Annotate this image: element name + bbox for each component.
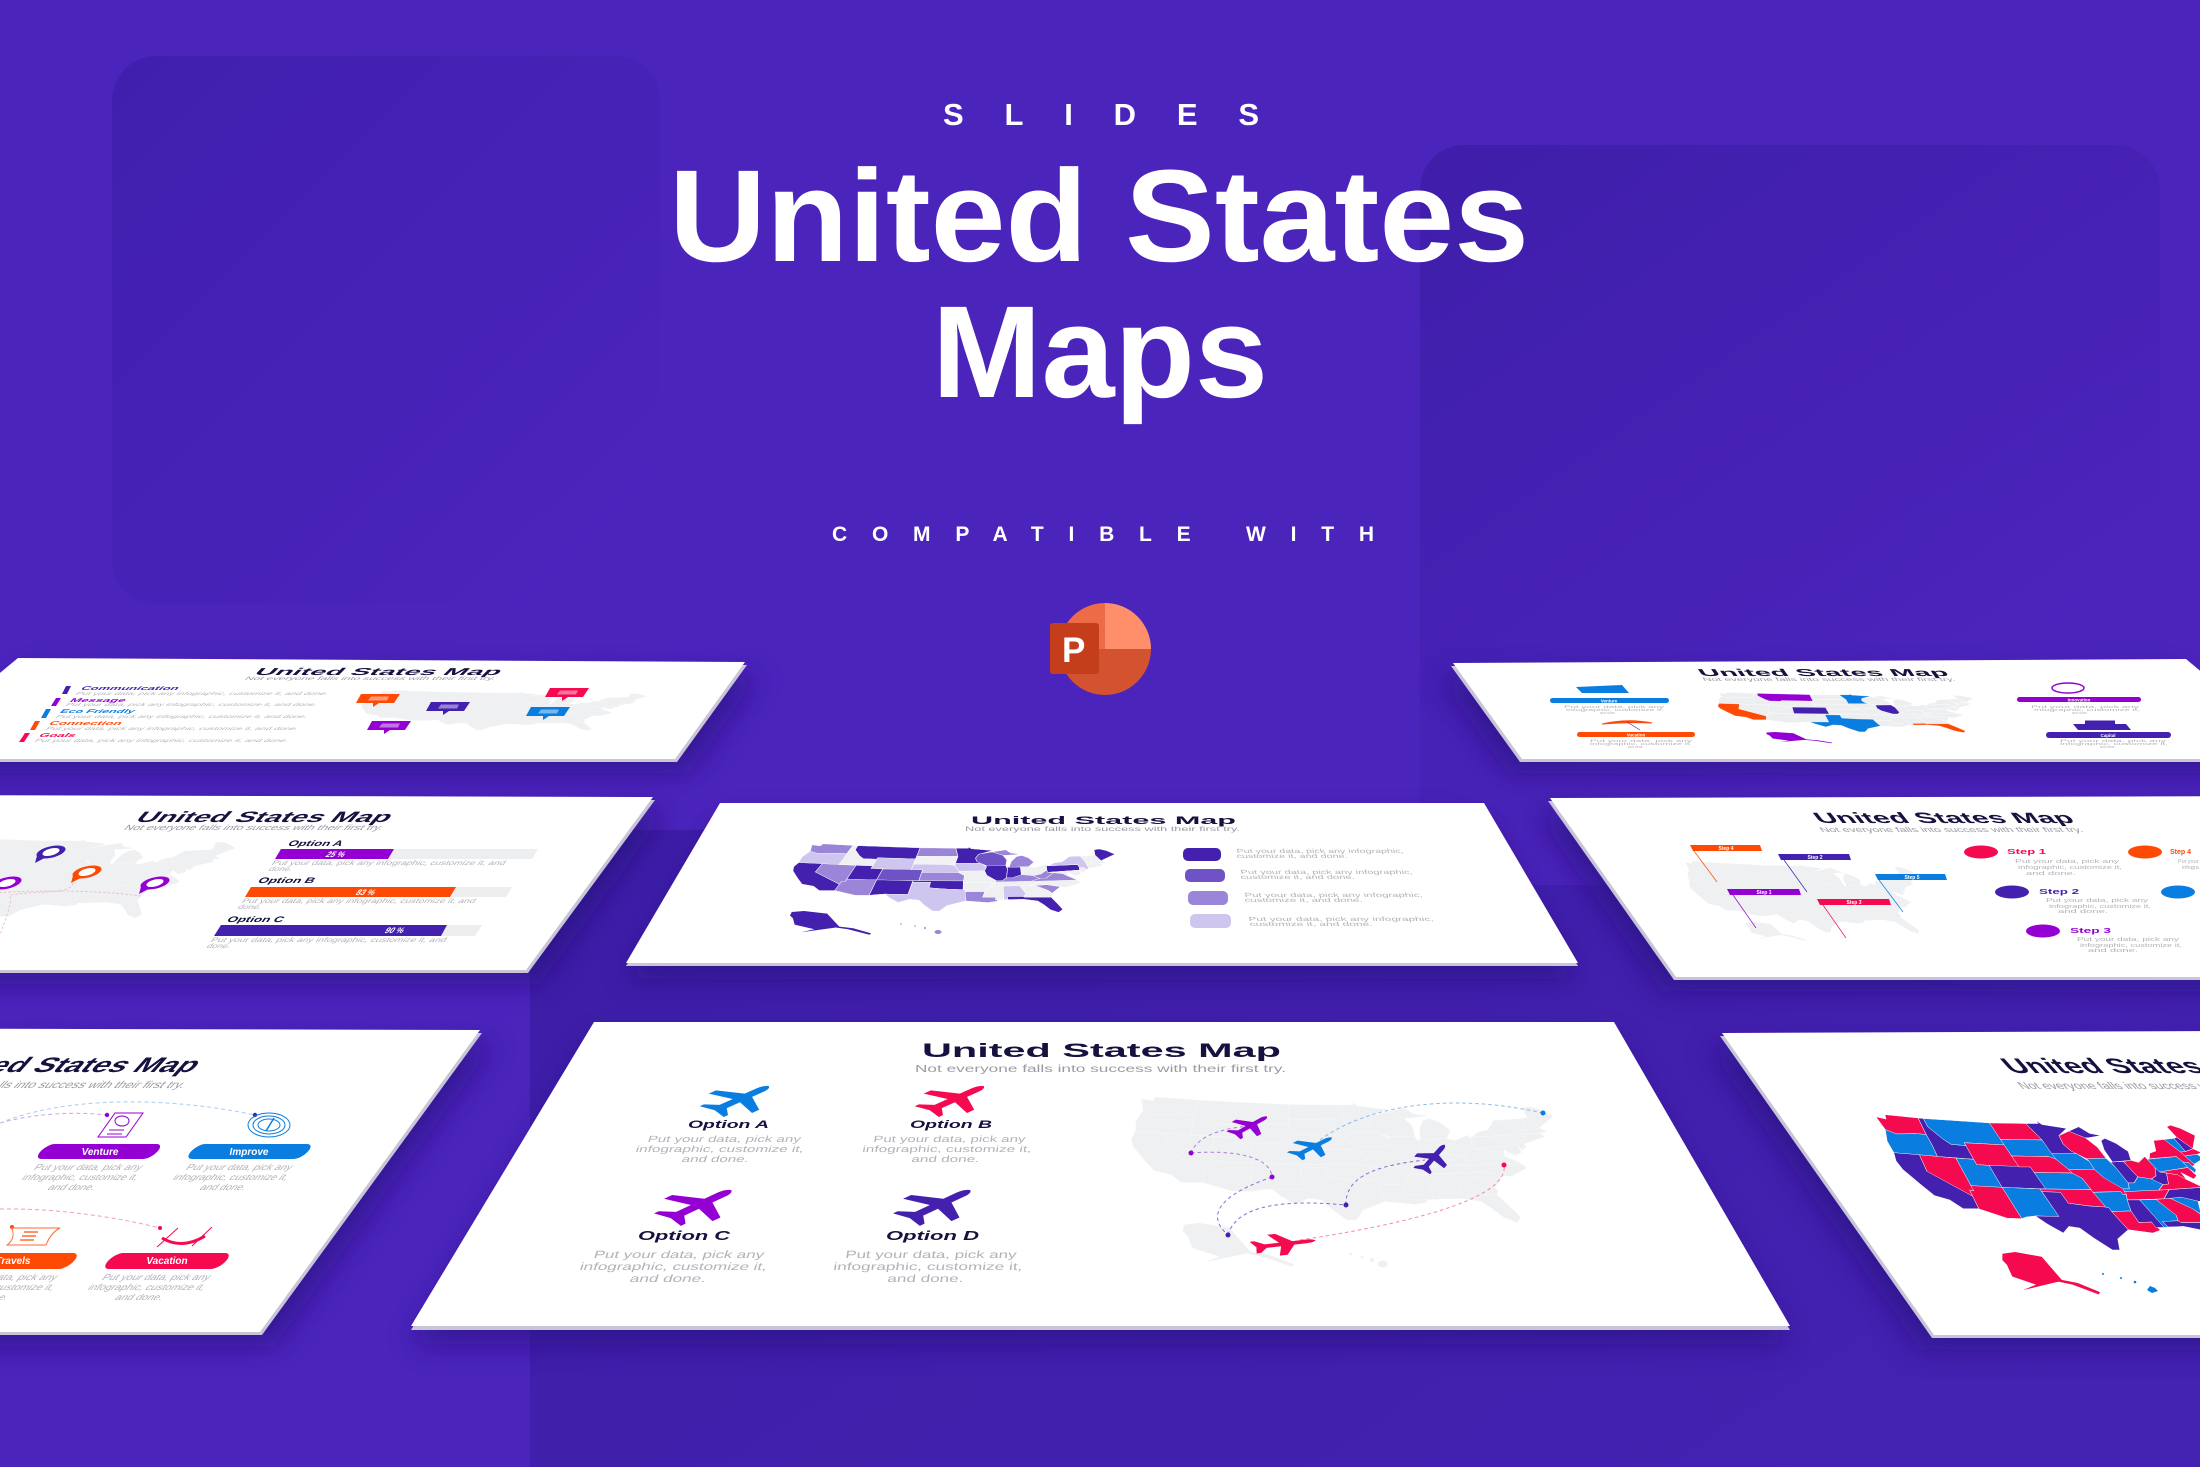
slide title: United States Map <box>1994 1054 2200 1078</box>
bar: Option B 83%: done. <box>236 903 264 911</box>
map planes <box>1221 1109 1459 1258</box>
slide subtitle: Not everyone falls into success with their first try. <box>915 1064 1286 1075</box>
legend swatches and text: Put your data, pick any infographic, <box>1236 848 1405 855</box>
legend swatches and text: customize it, and done. <box>1236 853 1349 860</box>
icon: PowerPoint logo <box>1050 603 1151 695</box>
pills: Venture <box>82 1147 119 1158</box>
icon: document <box>98 1113 143 1137</box>
option B: infographic, customize it, <box>862 1144 1032 1154</box>
bar: Option C 90%: 90 % <box>383 926 407 935</box>
icon: flag <box>1576 685 1629 693</box>
bar: Option B 83%: 83 % <box>354 888 378 897</box>
descriptions: infographic, customize it, <box>2060 742 2168 746</box>
slide title: United States Map <box>971 815 1237 827</box>
flags: Step 5 <box>1904 875 1920 881</box>
pill: Venture <box>1550 698 1669 704</box>
pills <box>0 1144 315 1269</box>
choropleth map <box>785 844 1117 912</box>
bar: Option A 25% <box>267 839 538 873</box>
legend swatches and text: customize it, and done. <box>1244 897 1364 904</box>
slide subtitle: Not everyone falls into success with their first try. <box>965 827 1241 833</box>
descriptions: Put your data, pick any <box>183 1163 296 1173</box>
slide subtitle: Not everyone falls into success with their first try. <box>1701 677 1958 683</box>
option D: and done. <box>887 1273 964 1285</box>
option D: Option D <box>886 1228 980 1243</box>
list of five topics: Put your data, pick any infographic, customize it, and done. <box>32 739 291 744</box>
icon: hammock <box>157 1227 212 1247</box>
pills: Improve <box>230 1147 269 1158</box>
bar: Option A 25%: Option A <box>286 839 347 848</box>
bar: Option A 25%: done. <box>267 865 295 873</box>
Hawaii <box>1350 1252 1388 1268</box>
flags: Step 1 <box>1756 890 1772 896</box>
option B: Option B <box>910 1119 992 1131</box>
descriptions: Put your data, pick any <box>1590 739 1693 743</box>
list of five topics <box>19 686 331 744</box>
title: Maps <box>932 278 1268 425</box>
label: compatible with: COMPATIBLE WITH <box>832 523 1374 546</box>
list of five topics: Put your data, pick any infographic, customize it, and done. <box>43 727 301 732</box>
flags: Step 4 <box>1718 846 1734 852</box>
legend swatches and text: Put your data, pick any infographic, <box>1244 892 1424 899</box>
bar: Option C 90%: Option C <box>225 915 288 924</box>
descriptions <box>1564 705 2168 749</box>
slide subtitle: Not everyone falls into success with their first try. <box>242 676 499 682</box>
list of five topics: Put your data, pick any infographic, customize it, and done. <box>73 692 331 697</box>
grey US map <box>1122 1097 1578 1222</box>
panel: bottom-right slide, red and blue map <box>1720 1029 2200 1338</box>
slide subtitle: Not everyone falls into success with their first try. <box>1817 826 2085 834</box>
option D <box>833 1179 1023 1285</box>
descriptions: Put your data, pick any <box>2060 739 2167 743</box>
step descriptions: and done. <box>2026 871 2077 877</box>
descriptions: infographic, customize it, <box>85 1283 208 1293</box>
step items: Step 3 <box>2070 928 2111 935</box>
descriptions: and done. <box>1600 711 1616 715</box>
pill: Venture: Venture <box>1601 698 1618 704</box>
option C: Put your data, pick any <box>592 1249 767 1261</box>
step items: Step 4 <box>2170 849 2191 856</box>
step descriptions: Put your data, pick any <box>2015 859 2119 865</box>
three-colour map <box>1860 1115 2200 1253</box>
Hawaii <box>900 923 942 934</box>
slide shadows <box>0 672 2200 1349</box>
list of five topics: Put your data, pick any infographic, customize it, and done. <box>53 715 310 720</box>
descriptions: and done. <box>45 1183 98 1193</box>
panel: top-left slide, communication list <box>0 658 747 762</box>
legend swatches and text: Put your data, pick any infographic, <box>1240 869 1414 876</box>
descriptions: and done. <box>112 1293 166 1303</box>
icon: PowerPoint logo: P <box>1062 631 1085 670</box>
step descriptions: Put your <box>2178 859 2199 865</box>
bar: Option B 83% <box>236 876 512 911</box>
list of five topics: Message <box>67 698 129 704</box>
map tags <box>356 688 589 734</box>
descriptions: Put your data, pick any <box>31 1163 146 1173</box>
descriptions: infographic, customize it, <box>19 1173 141 1183</box>
pill: Capital <box>2046 732 2171 738</box>
title <box>669 142 1529 425</box>
descriptions: infographic, customize it, <box>1590 742 1692 746</box>
icon: rings <box>248 1113 290 1137</box>
bar: Option B 83%: Option B <box>256 876 319 885</box>
bar: Option B 83%: Put your data, pick any infographic, customize it, and <box>240 897 478 905</box>
icon: ticket <box>7 1228 60 1245</box>
slide title: United States Map <box>131 809 399 825</box>
step descriptions <box>2015 859 2200 954</box>
panel: top-right slide, highlighted states <box>1451 659 2200 762</box>
panel: middle-right slide, flag steps <box>1548 796 2200 980</box>
icon: compass <box>2052 683 2084 693</box>
Alaska <box>790 911 871 935</box>
icon: Alaska <box>1765 732 1833 743</box>
step descriptions: and done. <box>2058 909 2109 915</box>
descriptions: Put your data, pick any <box>99 1273 214 1283</box>
step descriptions: Put your data, pick any <box>2046 898 2148 904</box>
option C: Option C <box>638 1228 731 1243</box>
list of five topics: Connection <box>46 721 124 727</box>
dotted routes <box>0 883 141 935</box>
suitcase body top <box>2085 720 2115 724</box>
slide title: United States Map <box>251 666 507 677</box>
option A: infographic, customize it, <box>634 1144 806 1154</box>
flags <box>1690 845 1947 938</box>
Alaska <box>1181 1223 1295 1267</box>
bar: Option A 25%: Put your data, pick any infographic, customize it, and <box>270 859 508 867</box>
option A: Put your data, pick any <box>646 1134 803 1144</box>
option B: Put your data, pick any <box>873 1134 1027 1144</box>
step descriptions: and done. <box>2088 948 2139 954</box>
label: SLIDES: SLIDES <box>943 97 1259 132</box>
grey US map <box>1674 861 1952 941</box>
step descriptions: infographic, customize it, <box>2080 943 2183 949</box>
descriptions <box>0 1163 296 1303</box>
option D: infographic, customize it, <box>833 1261 1023 1273</box>
Hawaii <box>2102 1273 2158 1293</box>
legend swatches and text: customize it, and done. <box>1249 921 1374 928</box>
step descriptions: infographic, customize it, <box>2018 865 2123 871</box>
option C: and done. <box>628 1273 708 1285</box>
descriptions: and done. <box>197 1183 249 1193</box>
step items: Step 2 <box>2039 889 2079 896</box>
panel: bottom-left slide, route icons <box>0 1028 482 1335</box>
slide title: United States Map <box>922 1041 1281 1062</box>
legend swatches and text: customize it, and done. <box>1240 874 1356 881</box>
Alaska <box>2000 1252 2101 1294</box>
route end points <box>1188 1110 1546 1238</box>
option A: Option A <box>688 1119 769 1131</box>
descriptions: infographic, customize it, <box>1566 708 1664 712</box>
map pins <box>0 846 174 894</box>
title: United States <box>669 142 1529 289</box>
icon: umbrella <box>1602 721 1652 730</box>
list of five topics: Put your data, pick any infographic, customize it, and done. <box>63 703 320 708</box>
list of five topics: Goals <box>36 733 79 739</box>
option A <box>634 1076 806 1164</box>
grey US map <box>347 690 650 731</box>
slide subtitle: Not everyone falls into success with their first try. <box>121 823 387 832</box>
bar: Option A 25%: 25 % <box>324 850 348 859</box>
step items <box>1964 846 2195 938</box>
step descriptions: Put your data, pick any <box>2077 937 2179 943</box>
step descriptions: infogra <box>2182 865 2200 871</box>
descriptions: and done. <box>2100 745 2116 749</box>
option B <box>862 1076 1032 1164</box>
descriptions: infographic, customize it, <box>170 1173 291 1183</box>
pills: Vacation <box>146 1256 188 1267</box>
flags: Step 3 <box>1846 900 1862 906</box>
step items: Step 1 <box>2007 849 2046 856</box>
slide title: United States Map <box>1808 809 2079 827</box>
descriptions: Put your data, pick any <box>2031 705 2140 709</box>
option D: Put your data, pick any <box>845 1249 1018 1261</box>
legend swatches and text <box>1183 848 1435 928</box>
descriptions: infographic, customize it, <box>2034 708 2140 712</box>
bar: Option C 90% <box>205 915 482 950</box>
descriptions: and done. <box>1628 745 1644 749</box>
step descriptions: infographic, customize it, <box>2049 904 2152 910</box>
descriptions: and done. <box>2072 711 2088 715</box>
flags: Step 2 <box>1807 855 1823 861</box>
option A: and done. <box>680 1154 751 1164</box>
icon: suitcase <box>2073 724 2131 730</box>
pill: Vacation: Vacation <box>1627 732 1646 738</box>
descriptions: Put your data, pick any <box>1564 705 1665 709</box>
list of five topics: Eco Friendly <box>57 709 138 715</box>
panel: middle-centre slide, purple choropleth <box>626 803 1578 966</box>
grey US map <box>0 836 244 918</box>
option C: infographic, customize it, <box>578 1261 769 1273</box>
panel: bottom-centre slide, flight routes <box>411 1022 1790 1330</box>
bar: Option C 90%: done. <box>205 942 233 950</box>
bar: Option C 90%: Put your data, pick any infographic, customize it, and <box>209 936 449 944</box>
slide title: United States Map <box>1695 668 1952 679</box>
map with coloured states <box>1707 692 2001 733</box>
pill: Vacation <box>1577 732 1695 738</box>
pill: Capital: Capital <box>2100 733 2116 738</box>
pill: Innovation: Innovation <box>2068 698 2091 702</box>
legend swatches and text: Put your data, pick any infographic, <box>1248 916 1435 923</box>
flight routes <box>1191 1103 1543 1240</box>
dashed routes <box>0 1102 255 1228</box>
option C <box>578 1179 769 1285</box>
pill: Innovation <box>2017 697 2141 702</box>
list of five topics: Communication <box>78 686 181 692</box>
option B: and done. <box>911 1154 980 1164</box>
panel: middle-left slide, progress bars <box>0 795 655 973</box>
